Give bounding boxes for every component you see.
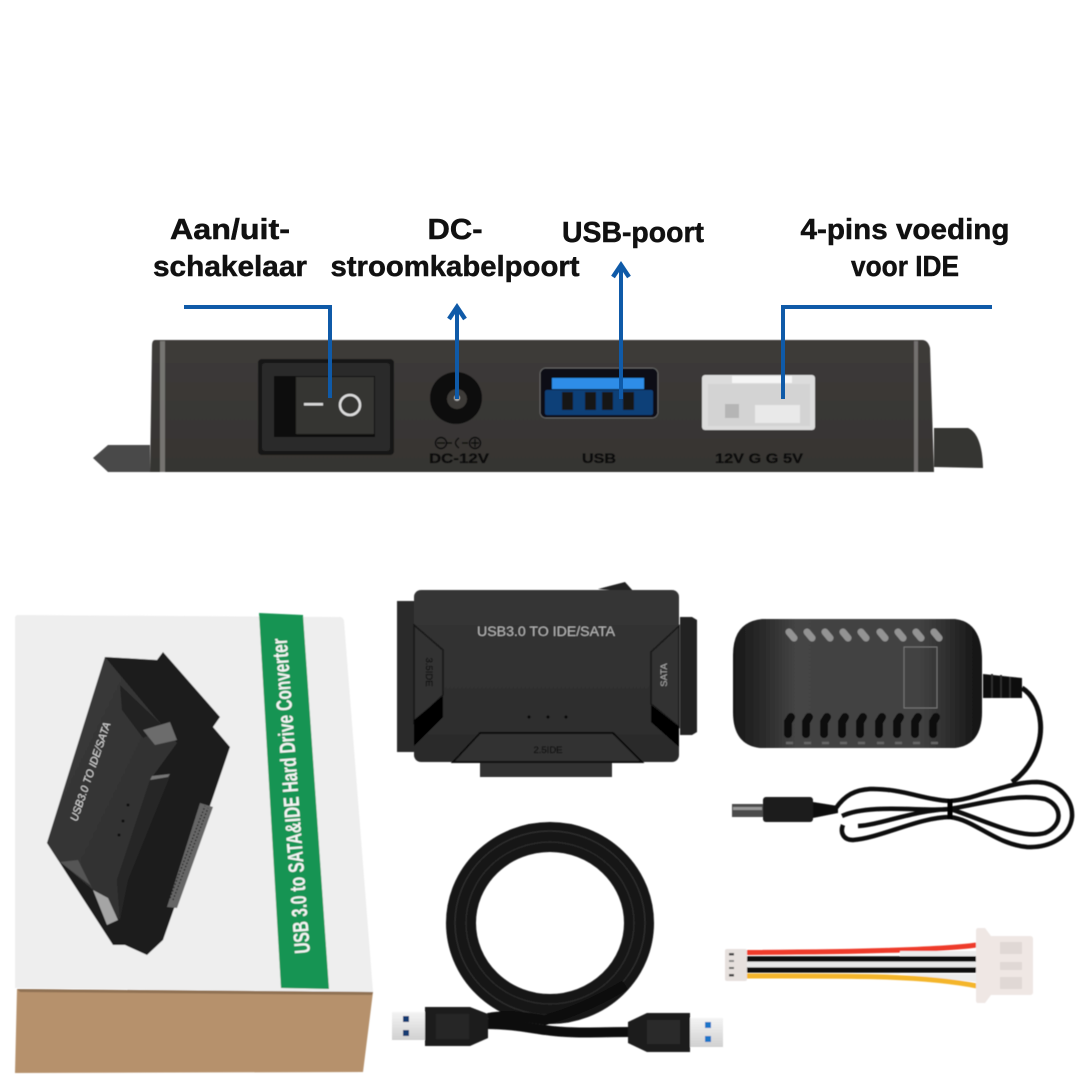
box face [15, 615, 373, 992]
label: 4-pin power for IDE: voor IDE [851, 251, 959, 283]
USB port: USB [582, 450, 616, 466]
rocker switch [258, 359, 394, 455]
label: on/off switch: Aan/uit- [170, 214, 290, 246]
4-pin connector: 12V G G 5V [715, 450, 804, 466]
product box [15, 613, 373, 1073]
left clip [93, 445, 150, 472]
small connector [725, 949, 747, 981]
label: DC power port: DC- [428, 214, 482, 246]
USB port [540, 368, 658, 466]
pin header [167, 803, 213, 908]
adapter body [414, 590, 679, 762]
power switch [598, 582, 634, 592]
bottom connector [480, 760, 612, 777]
label: 4-pin power for IDE [800, 214, 1010, 283]
label: on/off switch: schakelaar [153, 251, 307, 283]
coiled cable [836, 782, 1072, 847]
label: 4-pin power for IDE: 4-pins voeding [800, 214, 1010, 246]
molex connector [976, 928, 1033, 1003]
brick [733, 619, 982, 748]
top vents [789, 632, 939, 638]
adapter [397, 582, 697, 777]
arrow: USB port [613, 265, 629, 399]
3.5IDE face [414, 625, 443, 723]
power adapter [732, 619, 1072, 847]
label: USB port: USB-poort [562, 217, 704, 249]
IDE power wire [725, 928, 1033, 1003]
2.5IDE face [453, 733, 642, 762]
4-pin connector [702, 375, 815, 466]
USB cable [392, 831, 723, 1052]
arrow: switch leader [184, 307, 330, 398]
right USB plug [628, 1013, 723, 1052]
DC plug [732, 797, 838, 822]
pictured adapter [47, 652, 230, 955]
label: on/off switch [153, 214, 307, 283]
coil [461, 837, 639, 1009]
adapter: 2.5IDE [533, 745, 563, 756]
left connector [397, 601, 415, 752]
stripe text: USB 3.0 to SATA&IDE Hard Drive Converter [267, 637, 315, 954]
DC jack: DC-12V [429, 450, 490, 466]
right connector [680, 617, 697, 735]
cable tail [488, 1024, 628, 1032]
green stripe [259, 613, 329, 989]
pictured adapter: USB3.0 TO IDE/SATA [68, 721, 114, 823]
power cable [1012, 688, 1041, 782]
label: DC power port [330, 214, 580, 283]
adapter labels: USB3.0 TO IDE/SATA [477, 623, 616, 639]
arrow: DC port [449, 307, 465, 399]
adapter: 3.5IDE [423, 657, 434, 687]
cable tie [948, 799, 952, 819]
label recess [904, 647, 937, 708]
LEDs [527, 715, 568, 719]
wires [747, 945, 977, 952]
left USB plug [392, 1007, 488, 1046]
bottom vents [788, 717, 936, 734]
cardboard side [15, 989, 373, 1073]
DC jack [429, 372, 490, 466]
arrow: 4-pin leader [783, 307, 992, 399]
SATA face [651, 626, 679, 727]
adapter: SATA [659, 663, 670, 687]
right clip [934, 428, 983, 468]
label: DC power port: stroomkabelpoort [330, 251, 580, 283]
housing [150, 340, 934, 472]
device rear panel [93, 340, 983, 472]
strain relief [983, 674, 1022, 698]
